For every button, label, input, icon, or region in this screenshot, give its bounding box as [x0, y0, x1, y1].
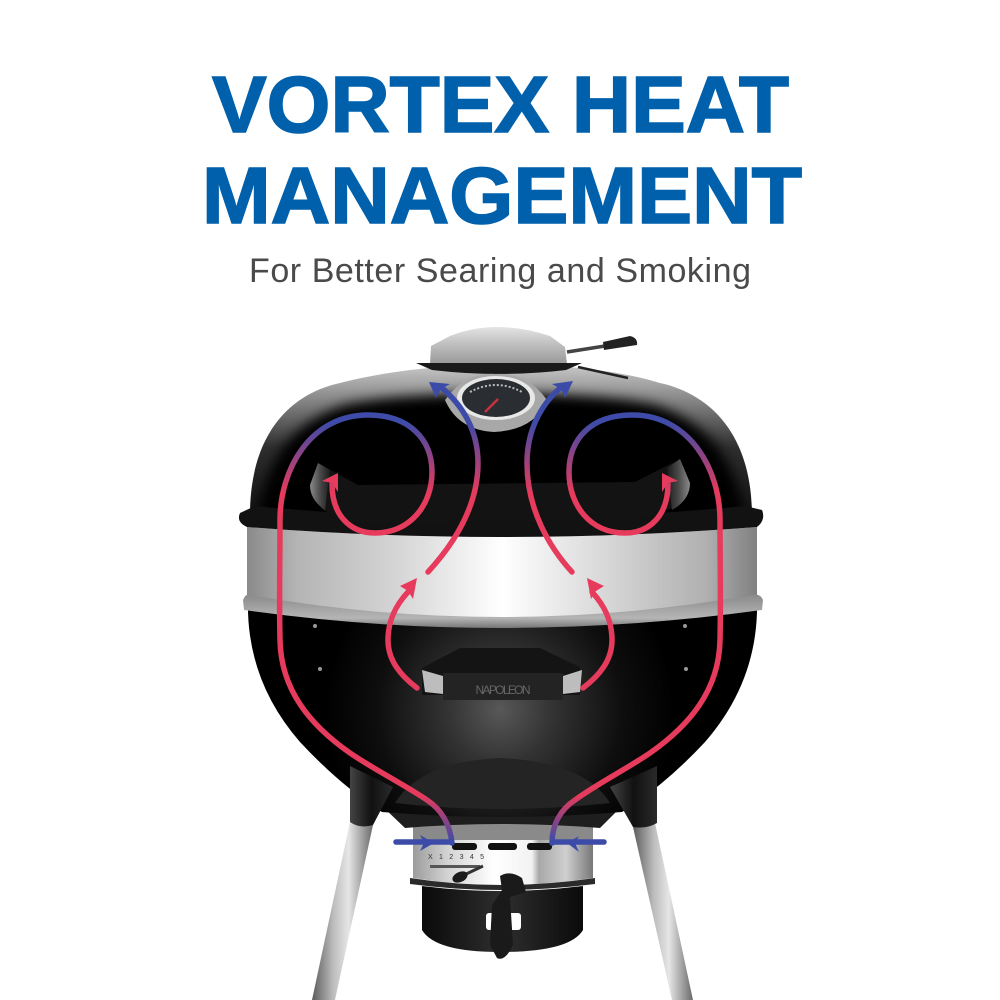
arrow: left centre riser: [428, 388, 478, 572]
left leg socket: [350, 766, 393, 826]
title: VORTEX HEAT: [212, 60, 789, 149]
arrow: right centre riser: [527, 388, 572, 572]
grill illustration: [239, 327, 763, 1000]
ash catcher: X 1 2 3 4 5: [428, 854, 484, 861]
right leg: [633, 823, 693, 1000]
top vent: [416, 327, 637, 374]
lid handle: [310, 459, 690, 523]
thermometer: [445, 374, 547, 432]
arrow: right outer loop: [552, 415, 720, 843]
subtitle: For Better Searing and Smoking: [249, 252, 751, 290]
bowl handle: [422, 648, 582, 700]
bowl handle: NAPOLEON: [476, 683, 530, 697]
airflow arrows: [280, 388, 720, 843]
arrowheads: [322, 381, 678, 599]
arrow: left air intake: [396, 835, 450, 851]
bowl screws: [313, 624, 688, 671]
lid: [250, 366, 752, 512]
title: [202, 60, 802, 240]
arrow: right air intake: [554, 836, 604, 852]
lower rim: [243, 595, 763, 628]
bowl bottom reflection: [395, 758, 610, 809]
arrow: right handle to band: [583, 592, 612, 688]
bowl underside: [382, 806, 622, 828]
left leg: [312, 822, 373, 1000]
arrow: left handle to band: [388, 592, 417, 688]
right leg socket: [610, 766, 657, 828]
lid rim: [239, 506, 763, 537]
arrow: left outer loop: [280, 415, 452, 843]
title: MANAGEMENT: [202, 151, 802, 240]
silver band: [247, 527, 757, 620]
ash catcher: [410, 822, 595, 959]
grill bowl: [248, 600, 757, 817]
